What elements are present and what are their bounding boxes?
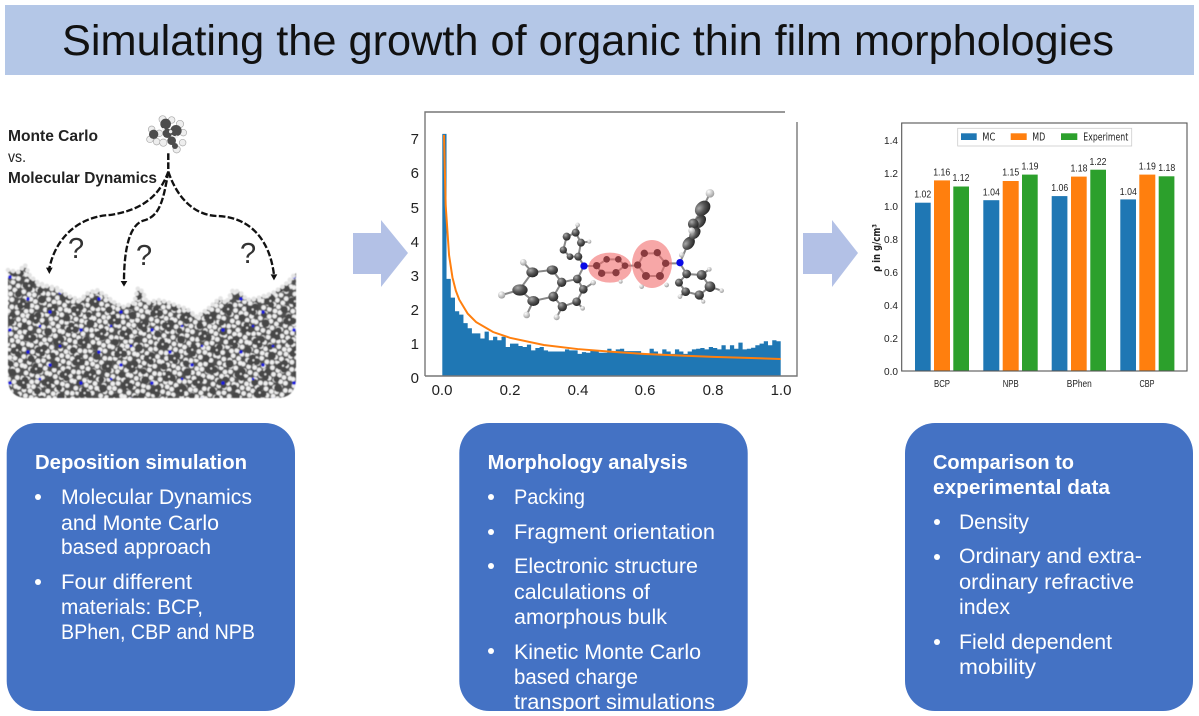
heading: Deposition simulation <box>35 452 247 474</box>
bullet list: transport simulations <box>514 691 715 714</box>
chart: fragment orientation histogram <box>411 112 797 399</box>
arrow: analysis to comparison <box>803 220 858 287</box>
bullet list: ordinary refractive <box>959 571 1134 594</box>
title: Simulating the growth of organic thin film morphologies <box>62 17 1114 65</box>
heading <box>933 452 1111 499</box>
label: Monte Carlo vs. Molecular Dynamics: Molecular Dynamics <box>8 170 157 187</box>
y axis labels: 4 <box>411 234 419 251</box>
heading: Morphology analysis <box>488 452 688 474</box>
bullet list: amorphous bulk <box>514 606 668 629</box>
legend: MD <box>1032 132 1045 144</box>
bullet list: index <box>959 596 1011 619</box>
x axis labels: BPhen <box>1067 378 1092 390</box>
value labels: 1.18 <box>1070 163 1088 175</box>
value labels: 1.16 <box>933 167 950 179</box>
value labels: 1.04 <box>1120 186 1137 198</box>
label: Monte Carlo vs. Molecular Dynamics: Monte Carlo <box>8 128 98 145</box>
x axis labels: BCP <box>934 378 950 390</box>
question marks: ? <box>136 240 152 272</box>
panel: deposition simulation <box>7 423 295 711</box>
bullet list: and Monte Carlo <box>61 512 219 535</box>
y axis ticks: 1.0 <box>884 201 898 213</box>
label: Monte Carlo vs. Molecular Dynamics <box>8 128 157 187</box>
x axis labels <box>432 382 791 399</box>
y axis title: ρ in g/cm³ <box>871 224 883 272</box>
y axis ticks: 1.4 <box>884 135 898 147</box>
y axis ticks: 0.8 <box>884 234 898 246</box>
bullet list: Field dependent <box>959 631 1112 654</box>
y axis labels: 1 <box>411 336 419 353</box>
x axis labels: 0.8 <box>703 382 723 399</box>
y axis ticks: 0.0 <box>884 366 898 378</box>
y axis labels <box>411 131 419 387</box>
panel: comparison to experimental data <box>905 423 1193 711</box>
value labels: 1.15 <box>1002 167 1019 179</box>
Experiment bars <box>953 170 1174 371</box>
value labels: 1.04 <box>983 186 1000 198</box>
bullet list: Packing <box>514 486 585 509</box>
x axis labels: CBP <box>1140 378 1154 390</box>
y axis ticks: 1.2 <box>884 168 898 180</box>
x axis labels: 0.2 <box>500 382 520 399</box>
value labels <box>914 156 1175 201</box>
x axis labels: 0.4 <box>568 382 588 399</box>
bullet list: based charge <box>514 666 638 689</box>
axes frame <box>425 112 797 376</box>
y axis labels: 7 <box>411 131 419 148</box>
bullet list: Ordinary and extra- <box>959 545 1142 568</box>
bullet list: calculations of <box>514 581 650 604</box>
heading: experimental data <box>933 477 1111 499</box>
molecular film surface <box>0 260 300 400</box>
y axis labels: 0 <box>411 370 419 387</box>
label: Monte Carlo vs. Molecular Dynamics: vs. <box>8 149 26 166</box>
question marks: ? <box>68 233 84 265</box>
legend: Experiment <box>1083 132 1128 144</box>
arrows: three possible landing paths <box>46 153 277 287</box>
x axis labels: 0.6 <box>635 382 655 399</box>
bullet list: Fragment orientation <box>514 521 715 544</box>
value labels: 1.12 <box>952 172 970 184</box>
question marks: ? <box>240 238 256 270</box>
legend <box>958 128 1132 146</box>
bullet list <box>934 511 1142 679</box>
histogram bars <box>442 134 781 376</box>
heading: Comparison to <box>933 452 1074 474</box>
bullet list: mobility <box>959 656 1037 679</box>
x axis labels: 0.0 <box>432 382 452 399</box>
title banner <box>5 5 1194 75</box>
x axis labels: NPB <box>1003 378 1019 390</box>
molecule: NPB structure <box>498 189 724 320</box>
value labels: 1.22 <box>1090 156 1107 168</box>
y axis ticks: 0.2 <box>884 333 898 345</box>
bullet list: Density <box>959 511 1029 534</box>
legend: MC <box>982 132 995 144</box>
x axis labels <box>934 378 1154 390</box>
bullet list <box>488 486 715 714</box>
bullet list: Molecular Dynamics <box>61 486 252 509</box>
y axis labels: 2 <box>411 302 419 319</box>
icon: falling molecule <box>147 116 187 153</box>
value labels: 1.18 <box>1158 162 1175 174</box>
bullet list <box>35 486 255 644</box>
value labels: 1.19 <box>1022 160 1039 172</box>
y axis ticks: 0.6 <box>884 267 898 279</box>
bullet list: materials: BCP, <box>61 596 203 619</box>
illustration: molecular deposition on film <box>0 116 300 400</box>
y axis labels: 5 <box>411 200 419 217</box>
question marks <box>68 233 256 272</box>
chart: density bar chart <box>871 123 1187 390</box>
MD bars <box>934 175 1155 371</box>
bullet list: Kinetic Monte Carlo <box>514 641 701 664</box>
value labels: 1.02 <box>914 189 931 201</box>
bullet list: Electronic structure <box>514 555 698 578</box>
highlighted biphenyl rings <box>588 240 672 288</box>
y axis ticks: 0.4 <box>884 300 898 312</box>
bullet list: Four different <box>61 571 192 594</box>
y axis labels: 6 <box>411 165 419 182</box>
value labels: 1.19 <box>1139 160 1156 172</box>
y axis labels: 3 <box>411 268 419 285</box>
axes frame <box>902 123 1187 371</box>
fitted orange curve <box>444 135 781 359</box>
bullet list: BPhen, CBP and NPB <box>61 621 255 644</box>
arrow: deposition to analysis <box>353 220 408 287</box>
MC bars <box>915 196 1136 371</box>
value labels: 1.06 <box>1051 182 1068 194</box>
x axis labels: 1.0 <box>771 382 791 399</box>
bullet list: based approach <box>61 536 211 559</box>
panel: morphology analysis <box>459 423 748 714</box>
y axis ticks <box>884 135 898 378</box>
